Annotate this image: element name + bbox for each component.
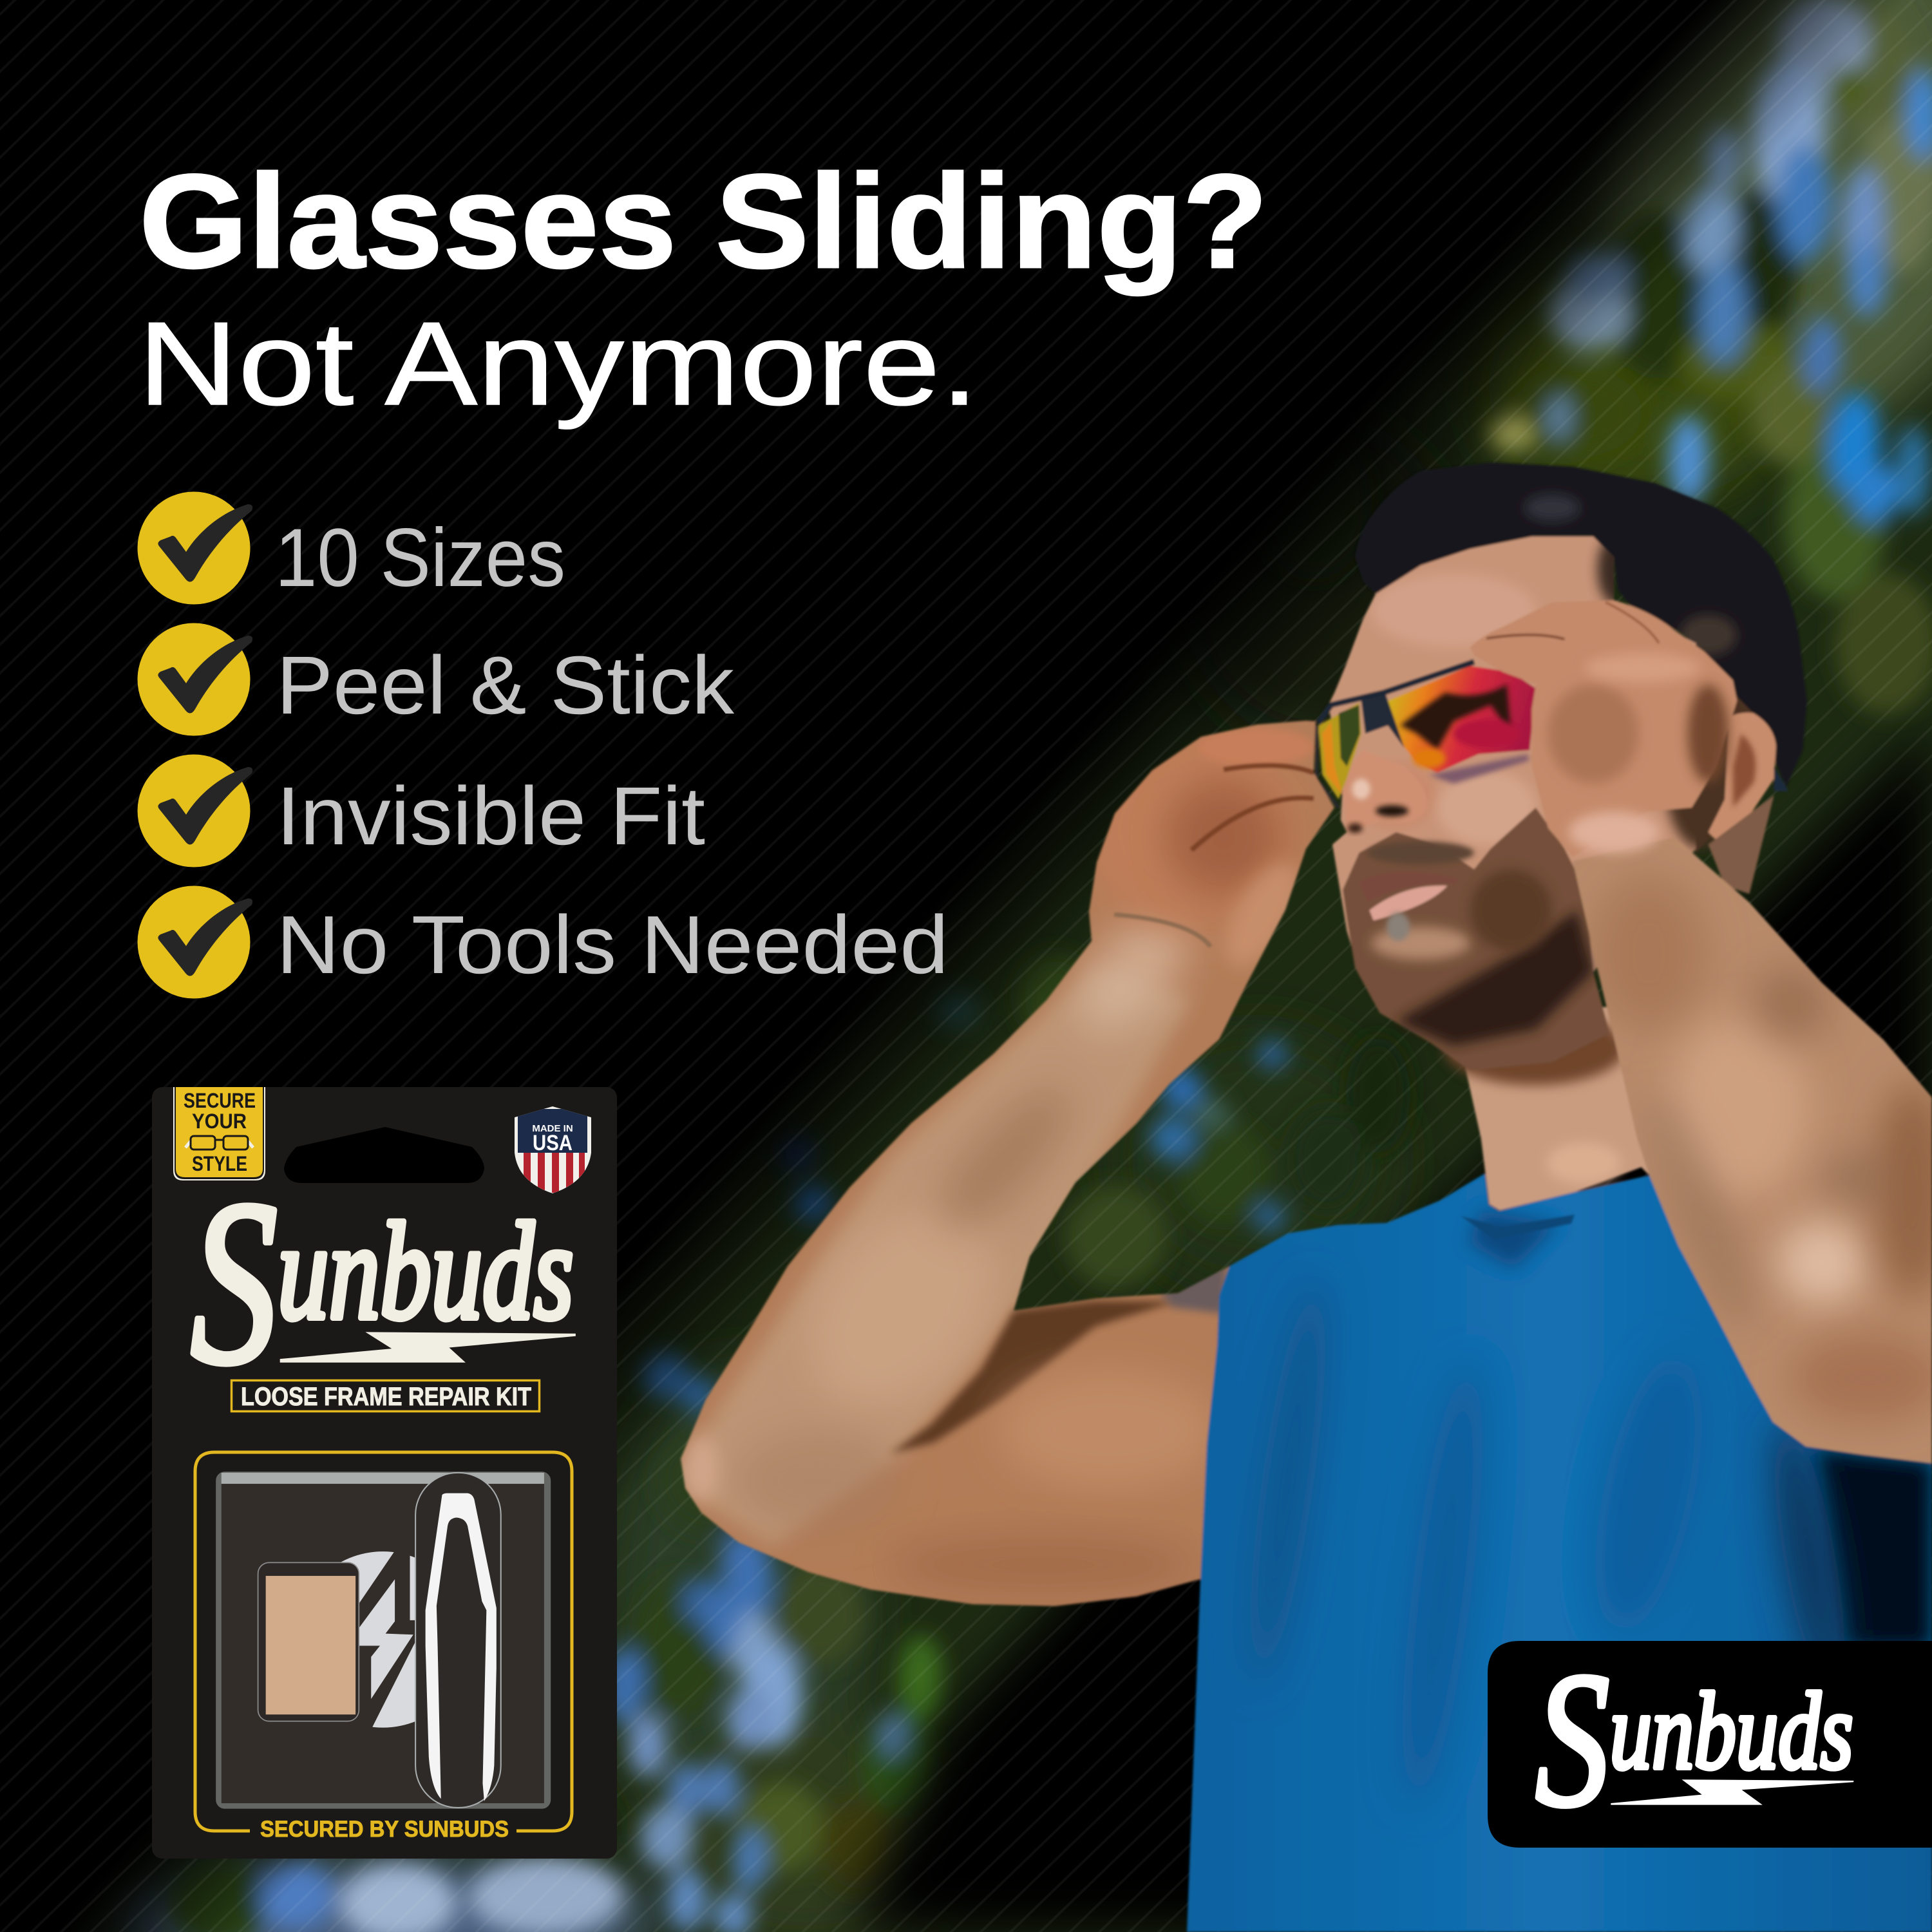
raised right forearm: [1546, 824, 1932, 1468]
badge logo text: unbuds: [1610, 1671, 1853, 1792]
package lightning bolt: [280, 1332, 576, 1363]
title: [138, 147, 1268, 430]
package logo text: S: [191, 1153, 278, 1413]
yellow tag: secure your style: STYLE: [192, 1152, 247, 1175]
yellow tag: secure your style: [173, 1087, 265, 1180]
title line 1: Glasses Sliding?: [139, 147, 1268, 296]
right hand on glasses: [1470, 600, 1737, 857]
bottom-right logo badge: [1488, 1632, 1932, 1848]
yellow tag: secure your style: SECURE: [184, 1089, 256, 1112]
ear: [1709, 713, 1788, 894]
neck: [1444, 1007, 1649, 1210]
benefit: Invisible Fit: Invisible Fit: [276, 770, 705, 862]
benefit: 10 Sizes: 10 Sizes: [275, 512, 565, 604]
raised left arm and hand: [670, 708, 1352, 1623]
badge background: [1488, 1641, 1932, 1848]
benefit: No Tools Needed: No Tools Needed: [276, 899, 949, 991]
nose detail: [1343, 750, 1427, 833]
badge: made in USA: USA: [533, 1131, 573, 1155]
blister pack: [216, 1472, 551, 1809]
man in sunglasses: [670, 462, 1932, 1932]
yellow frame: [195, 1452, 572, 1831]
benefit: No Tools Needed: [138, 886, 949, 998]
package card: [152, 1087, 617, 1859]
hair: [1355, 462, 1807, 853]
frame caption: SECURED BY SUNBUDS: [260, 1817, 509, 1842]
inner backing card: [222, 1484, 544, 1803]
benefit: Peel & Stick: Peel & Stick: [276, 639, 735, 732]
benefit: Invisible Fit: [138, 755, 705, 867]
badge: made in USA: MADE IN: [532, 1123, 573, 1134]
tweezers capsule: [415, 1473, 501, 1808]
hang hole: [284, 1127, 484, 1183]
blister shell: [216, 1472, 551, 1809]
benefits list: [138, 492, 949, 998]
product name label: LOOSE FRAME REPAIR KIT: [241, 1383, 531, 1411]
benefit: Peel & Stick: [138, 623, 735, 735]
adhesive pad: [258, 1562, 359, 1721]
beard and mouth: [1343, 808, 1610, 1070]
sunglasses: [1316, 662, 1536, 808]
photo background: lower right dark fade: [850, 727, 1932, 1932]
product package: [152, 1087, 617, 1859]
sun bolt emblem: [295, 1551, 471, 1728]
badge logo text: S: [1535, 1632, 1610, 1846]
benefit: 10 Sizes: [138, 492, 565, 604]
yellow tag: secure your style: YOUR: [192, 1110, 247, 1133]
badge: made in USA: [515, 1106, 591, 1193]
blue tank top: [1185, 1159, 1932, 1932]
icon: glasses: [185, 1136, 253, 1150]
badge lightning bolt: [1611, 1779, 1853, 1805]
package logo text: unbuds: [278, 1194, 574, 1348]
face: [1327, 535, 1716, 972]
title line 2: Not Anymore.: [138, 297, 979, 430]
